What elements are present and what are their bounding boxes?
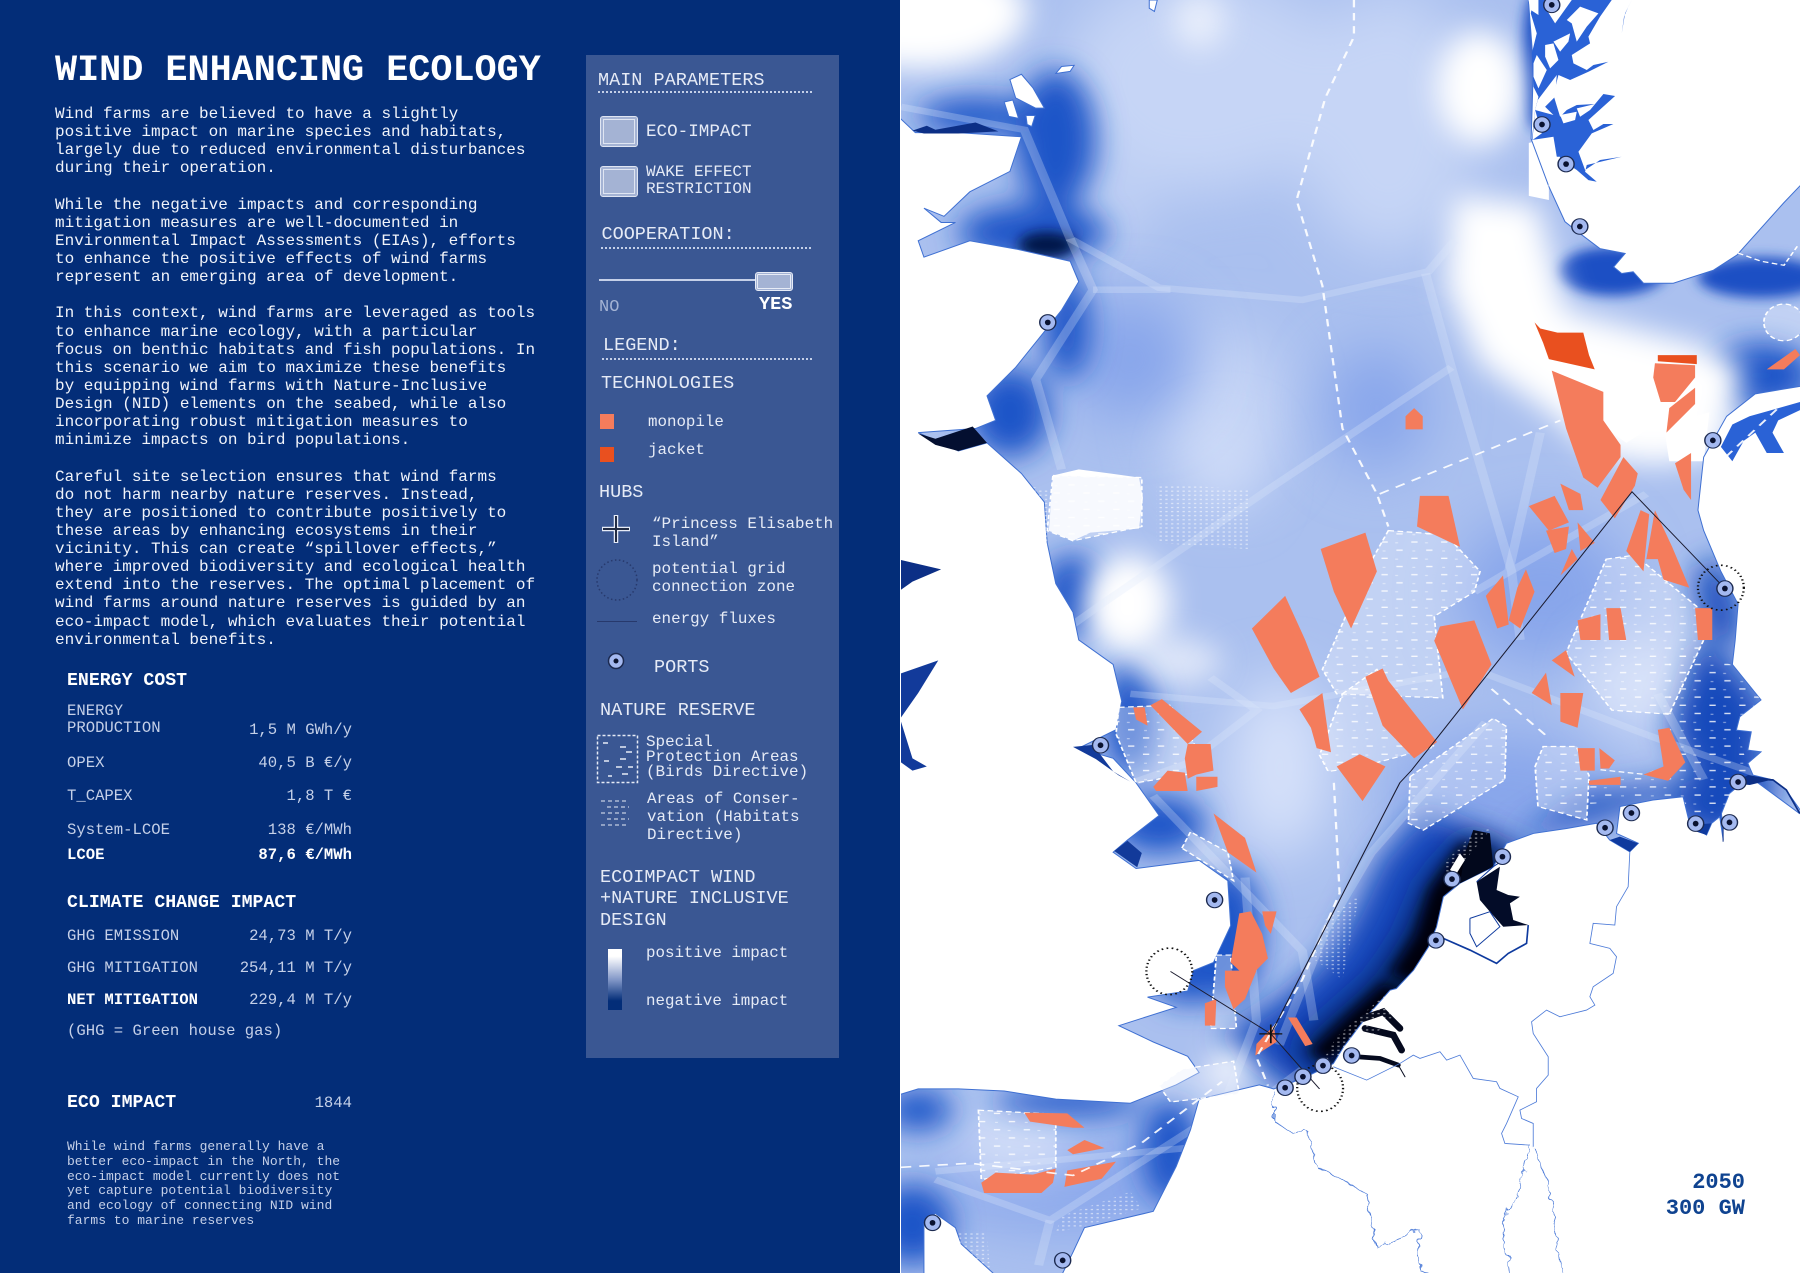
port centres	[930, 2, 1741, 1263]
soft pale patches	[1130, 0, 1225, 686]
label: yes: YES	[759, 294, 792, 314]
label: princess elisabeth island: “Princess Elisabeth Island”	[652, 514, 833, 550]
Humber	[1073, 745, 1130, 782]
heading: technologies: TECHNOLOGIES	[601, 373, 734, 394]
IJsselmeer	[1477, 867, 1528, 927]
Limfjord	[1721, 402, 1800, 461]
Scheldt delta	[1357, 1012, 1405, 1077]
EEZ boundaries	[901, 0, 1800, 1175]
icon: conservation area	[601, 800, 629, 826]
near-black northern inlet	[1019, 232, 1076, 258]
table: energy cost: LCOE	[67, 846, 104, 864]
white high-impact zones	[809, 0, 1744, 1090]
heading: main parameters: MAIN PARAMETERS	[598, 70, 765, 91]
label: special protection areas: Special Protection Areas (Birds Directive)	[646, 732, 808, 780]
icon: port	[608, 652, 624, 670]
eco impact score: 1844	[315, 1094, 352, 1112]
heading: nature reserve: NATURE RESERVE	[600, 700, 755, 721]
table: climate change impact: CLIMATE CHANGE IMPACT	[67, 893, 296, 913]
wind farms: monopile	[981, 349, 1800, 1193]
icon: energy fluxes line	[597, 621, 637, 622]
scenario label: year and capacity: 2050 300 GW	[1666, 1170, 1745, 1220]
table: climate change impact: GHG EMISSION	[67, 927, 179, 945]
sea base colour	[901, 0, 1800, 1273]
icon: grid connection zone	[596, 559, 638, 601]
label: wake effect restriction: WAKE EFFECT RESTRICTION	[646, 162, 752, 198]
table: climate change impact: 254,11 M T/y	[240, 959, 352, 977]
table: climate change impact: (GHG = Green house gas)	[67, 1022, 282, 1040]
table: energy cost: 138 €/MWh	[268, 820, 352, 838]
waterways	[1443, 860, 1528, 963]
icon: wake effect toggle	[600, 166, 638, 197]
land: continental Europe	[1062, 386, 1800, 1273]
bright central channel	[953, 433, 1698, 1167]
hub: Princess Elisabeth Island	[1259, 1024, 1282, 1043]
Scottish firth	[912, 122, 998, 133]
table: energy cost: OPEX	[67, 754, 104, 772]
map: North Sea eco-impact	[901, 0, 1800, 1273]
label: positive impact: positive impact	[646, 944, 788, 962]
label: eco-impact: ECO-IMPACT	[646, 122, 752, 142]
table: energy cost: 1,5 M GWh/y	[249, 720, 352, 738]
table: climate change impact: GHG MITIGATION	[67, 959, 198, 977]
table: energy cost: ENERGY PRODUCTION	[67, 702, 161, 736]
coastal dark blue	[872, 69, 1800, 1265]
Moray estuary	[918, 427, 987, 451]
grid connection zones	[1146, 565, 1744, 1111]
slider: cooperation	[599, 272, 793, 291]
land masses	[898, 0, 1800, 1273]
label: jacket: jacket	[648, 440, 705, 458]
eco impact score: ECO IMPACT	[67, 1092, 176, 1112]
label: ports: PORTS	[654, 657, 710, 678]
wind farms: jacket	[1535, 322, 1697, 369]
heading: cooperation: COOPERATION:	[602, 224, 735, 245]
table: energy cost	[67, 670, 352, 864]
Wadden Sea	[1460, 830, 1493, 883]
eco impact score	[67, 1092, 352, 1112]
country borders	[1273, 852, 1630, 1273]
land: Norway	[1528, 0, 1800, 283]
land: Cornwall	[924, 1213, 996, 1273]
table: energy cost: 1,8 T €	[286, 787, 352, 805]
fjord islands	[1528, 0, 1598, 187]
icon: island cross	[602, 515, 630, 543]
label: areas of conservation: Areas of Conser- vation (Habitats Directive)	[647, 790, 800, 844]
Wash	[1114, 841, 1142, 867]
ports	[925, 0, 1746, 1268]
label: negative impact: negative impact	[646, 992, 788, 1010]
Norwegian south coast shading	[1522, 0, 1800, 298]
label: potential grid connection zone: potential grid connection zone	[652, 560, 795, 596]
Solway firth	[901, 560, 941, 590]
white crisp blocks	[1049, 139, 1709, 541]
swatch: jacket	[600, 447, 614, 462]
inland waters and fjords	[901, 0, 1800, 1077]
table: climate change impact: 229,4 M T/y	[249, 991, 352, 1009]
table: energy cost: ENERGY COST	[67, 670, 187, 690]
slider thumb	[755, 272, 793, 291]
dotted habitat fill over dark coast	[1322, 829, 1492, 1061]
heading: ecoimpact wind and nature inclusive design: ECOIMPACT WIND +NATURE INCLUSIVE DESIGN	[600, 867, 789, 931]
German Bight and Danish coast	[1509, 555, 1784, 841]
icon: eco-impact toggle	[600, 116, 638, 147]
table: energy cost: System-LCOE	[67, 820, 170, 838]
energy flux lines	[1170, 492, 1725, 1089]
nature reserves	[978, 245, 1800, 1180]
label: monopile: monopile	[648, 412, 724, 430]
shipping lanes	[901, 107, 1761, 1265]
text block: eco impact note: While wind farms generally have a better eco-impact in the North, the eco-impact model currently does not yet capture potential biodiversity and ecology of connecting NID wind farms to marine reserves	[67, 1139, 340, 1228]
label: energy fluxes: energy fluxes	[652, 610, 776, 628]
Dutch waters	[1357, 775, 1800, 1077]
reserve habitat marks	[978, 475, 1761, 1180]
reserve dotted zones	[958, 484, 1360, 1269]
islands: Orkney	[1004, 0, 1157, 127]
heading: legend: LEGEND:	[603, 335, 681, 356]
table: energy cost: T_CAPEX	[67, 787, 133, 805]
label: no: NO	[599, 298, 619, 316]
slightly darker central sea	[930, 298, 1629, 1229]
table: energy cost: 40,5 B €/y	[258, 754, 352, 772]
table: climate change impact: 24,73 M T/y	[249, 927, 352, 945]
table: energy cost: 87,6 €/MWh	[258, 846, 352, 864]
text block: introduction: Wind farms are believed to have a slightly positive impact on marine species and habitats, largely due to reduced environmental disturbances during their operation. While the negative impacts and corresponding mitigation measures are well-documented in Environmental Impact Assessments (EIAs), efforts to enhance the positive effects of wind farms represent an emerging area of development. In this context, wind farms are leveraged as tools to enhance marine ecology, with a particular focus on benthic habitats and fish populations. In this scenario we aim to maximize these benefits by equipping wind farms with Nature-Inclusive Design (NID) elements on the seabed, while also incorporating robust mitigation measures to minimize impacts on bird populations. Careful site selection ensures that wind farms do not harm nearby nature reserves. Instead, they are positioned to contribute positively to these areas by enhancing ecosystems in their vicinity. This can create “spillover effects,” where improved biodiversity and ecological health extend into the reserves. The optimal placement of wind farms around nature reserves is guided by an eco-impact model, which evaluates their potential environmental benefits.	[55, 105, 535, 649]
land: Great Britain	[898, 116, 1231, 1103]
eco-impact field	[809, 0, 1800, 1265]
German estuaries	[1610, 837, 1638, 852]
light northern sea	[1062, 0, 1480, 486]
panel: text column background	[0, 0, 900, 1273]
table: climate change impact: NET MITIGATION	[67, 991, 198, 1009]
icon: special protection area	[596, 734, 638, 784]
Dutch coast shading	[1279, 841, 1497, 1082]
swatch: monopile	[600, 414, 614, 429]
Texel	[1450, 853, 1465, 873]
legend: impact gradient bar	[608, 949, 622, 1010]
table: climate change impact	[67, 893, 352, 1040]
panel: parameters and legend	[586, 55, 839, 1058]
heading: hubs: HUBS	[599, 482, 643, 503]
fjords: Norway	[1531, 0, 1632, 182]
title: WIND ENHANCING ECOLOGY	[55, 50, 541, 92]
